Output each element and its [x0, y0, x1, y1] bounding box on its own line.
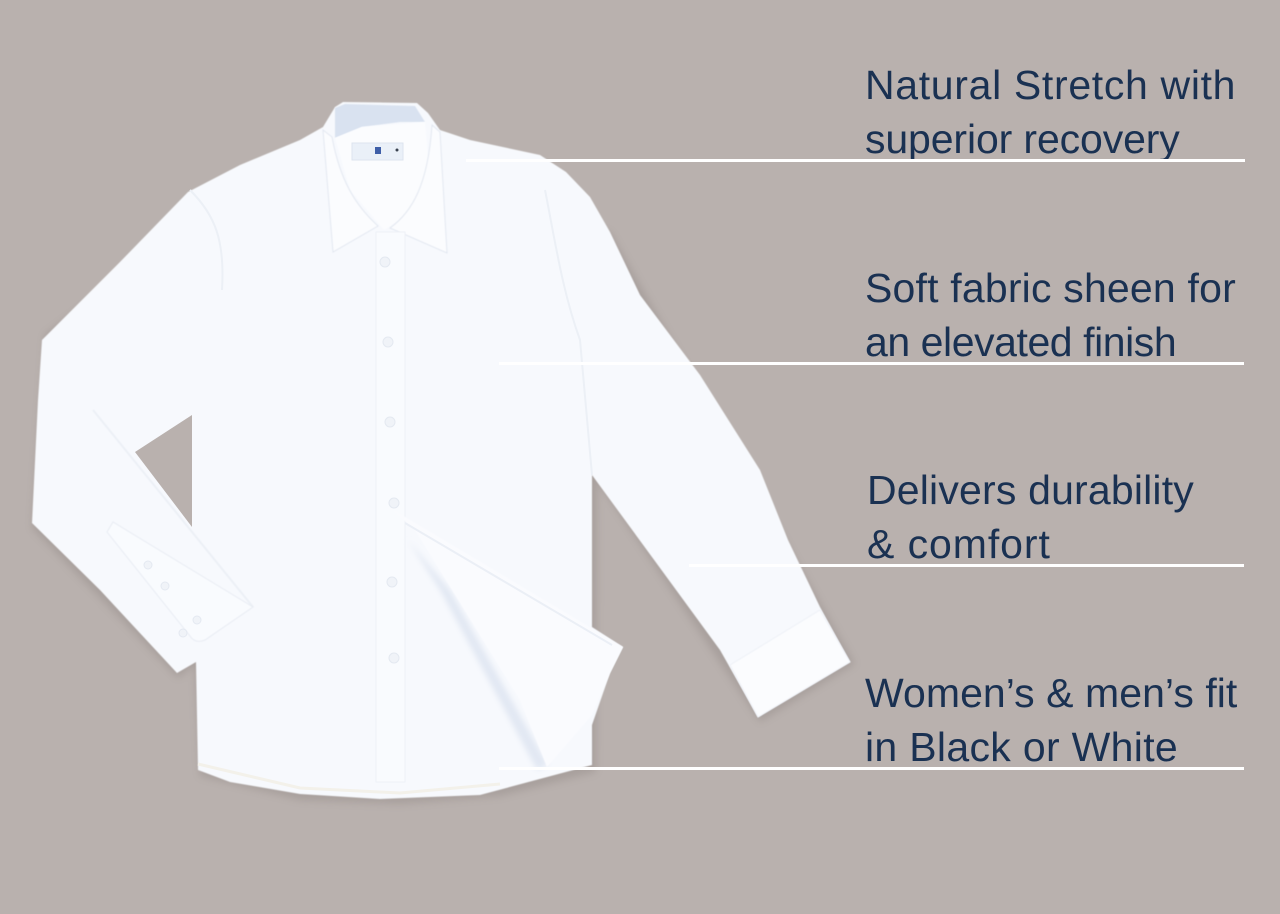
collar wings — [323, 125, 447, 253]
feature 1 text: superior recovery — [865, 116, 1180, 162]
feature 4 text: Women’s & men’s fit — [865, 670, 1237, 716]
feature 3 leader line — [689, 564, 1244, 567]
buttons — [380, 257, 399, 663]
left sleeve cuff — [93, 410, 253, 641]
feature 1 text — [865, 62, 1236, 162]
shirt body and sleeves — [32, 102, 850, 799]
armpit gap — [135, 415, 192, 527]
feature 1 leader line — [466, 159, 1245, 162]
right sleeve cuff — [730, 610, 850, 717]
feature 2 leader line — [499, 362, 1244, 365]
inner collar band — [335, 104, 425, 138]
feature 1 text: Natural Stretch with — [865, 62, 1236, 108]
button placket — [376, 232, 405, 782]
feature 4 leader line — [499, 767, 1244, 770]
feature 3 text: & comfort — [867, 521, 1051, 567]
feature 2 text — [865, 265, 1236, 365]
shirt shadow — [32, 190, 855, 804]
shirt label — [352, 143, 403, 160]
neck area — [335, 122, 432, 230]
feature 2 text: an elevated finish — [865, 319, 1176, 365]
feature 4 text: in Black or White — [865, 724, 1178, 770]
cuff buttons — [144, 561, 201, 637]
open front flap — [390, 508, 623, 770]
hem stitching — [198, 764, 500, 793]
feature 3 text: Delivers durability — [867, 467, 1194, 513]
feature 3 text — [867, 467, 1194, 567]
feature 4 text — [865, 670, 1237, 770]
shoulder and sleeve seams — [190, 190, 592, 475]
feature 2 text: Soft fabric sheen for — [865, 265, 1236, 311]
